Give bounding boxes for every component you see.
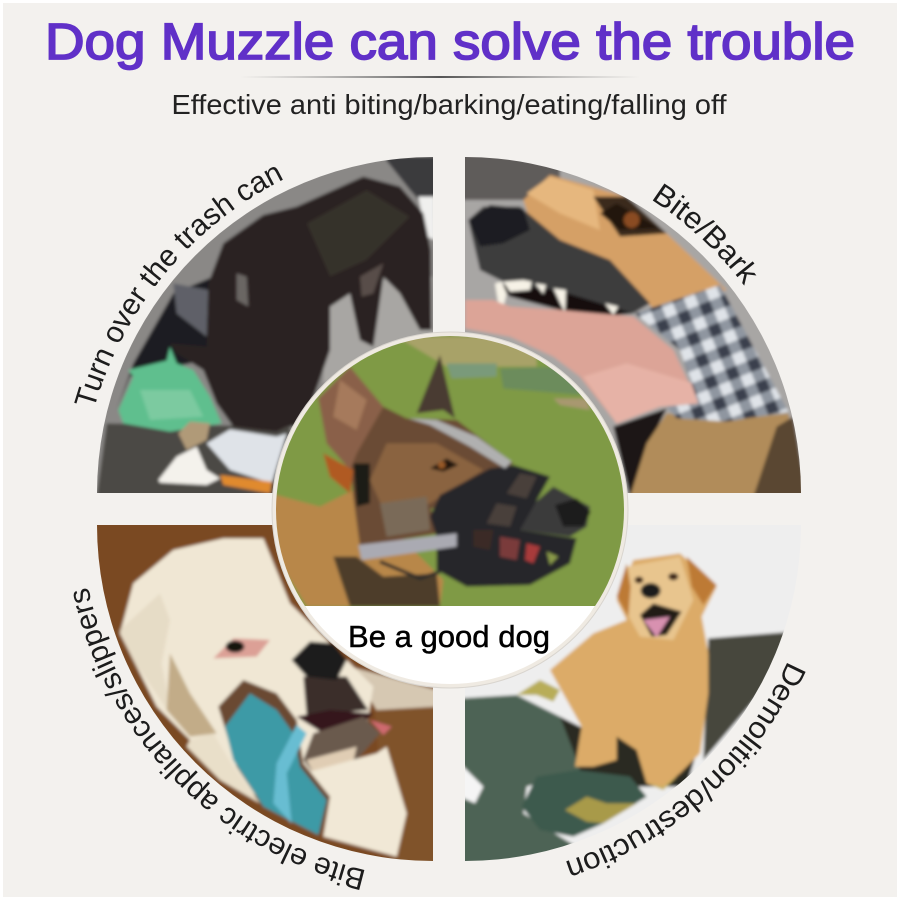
eye (213, 638, 270, 658)
sofa arm (465, 693, 581, 861)
reflective straps (408, 418, 512, 468)
label: bite electric appliances/slippers: Bite electric appliances/slippers (74, 588, 364, 890)
white rubbish (207, 429, 287, 483)
forearm and paw (187, 733, 260, 803)
cushion (522, 770, 647, 837)
center badge: be a good dog (270, 330, 630, 696)
label: demolition/destruction: Demolition/destruction (566, 663, 806, 876)
golden dog (550, 553, 717, 787)
slipper (218, 680, 330, 835)
eye (430, 458, 458, 472)
hand (465, 298, 689, 412)
sofa back (703, 632, 793, 760)
mouth (495, 283, 633, 317)
white dog (120, 538, 373, 797)
label: turn over the trash can: Turn over the trash can (74, 167, 283, 404)
ears (318, 367, 383, 470)
plaid sleeve (635, 285, 788, 422)
nose and dark muzzle (303, 677, 368, 715)
caption: Be a good dog (348, 619, 550, 654)
panel: turn over the trash can photo (90, 150, 440, 500)
panel: demolition/destruction photo (465, 552, 784, 861)
basket muzzle (430, 465, 577, 587)
golden dog face (523, 175, 727, 310)
dark fur and chest (613, 408, 667, 497)
dark snout and nose (468, 207, 650, 313)
head (350, 407, 513, 547)
panel: bite/bark photo (460, 150, 810, 500)
subtitle: Effective anti biting/barking/eating/falling off (172, 89, 727, 120)
snout (520, 487, 590, 537)
green trash bag (118, 347, 222, 432)
black trash bag (120, 277, 212, 399)
title: Dog Muzzle can solve the trouble (45, 13, 855, 70)
black dog (170, 177, 432, 432)
panel: bite electric appliances/slippers photo (90, 520, 440, 870)
label: bite/bark: Bite/Bark (652, 184, 756, 286)
dog neck and chest (270, 490, 443, 607)
teeth (495, 280, 618, 318)
center photo: muzzled dog on grass (270, 330, 630, 696)
